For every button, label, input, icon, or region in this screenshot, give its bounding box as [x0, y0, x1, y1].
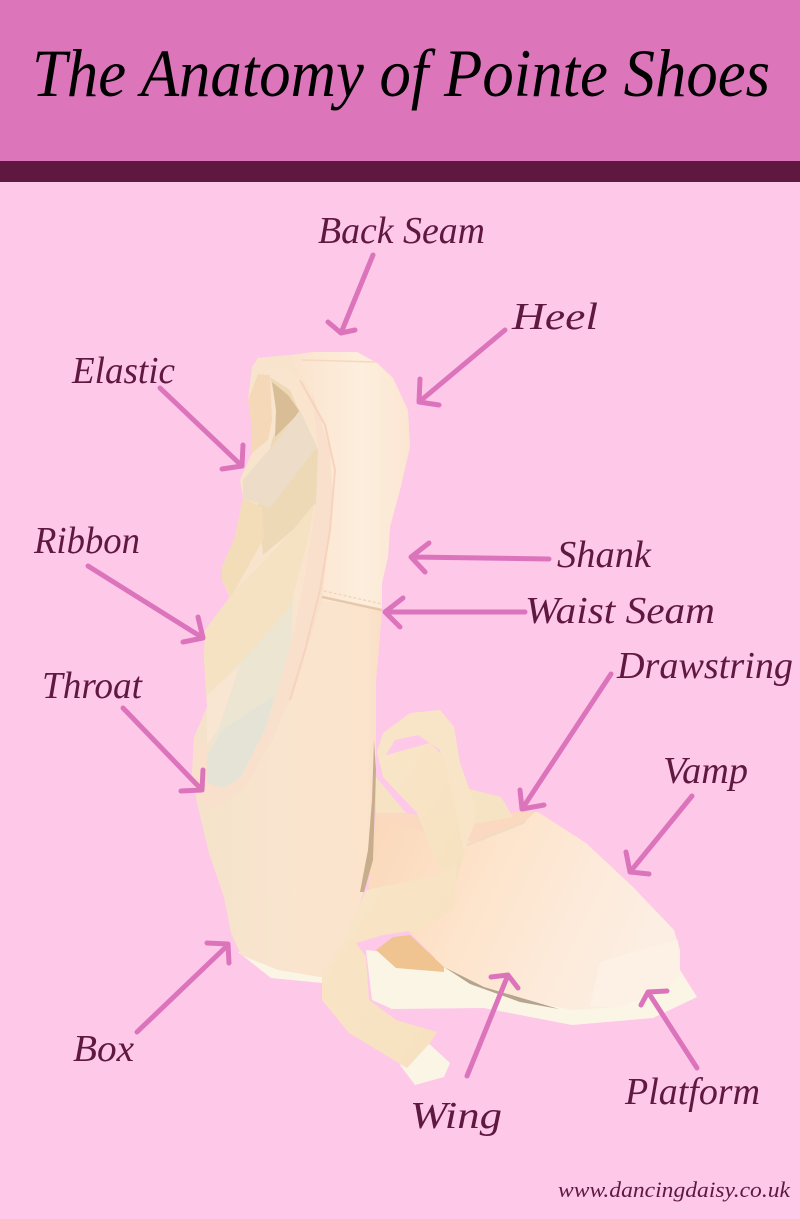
front strand: [379, 743, 464, 880]
side binding: [192, 392, 333, 808]
label: Box: [73, 943, 229, 1070]
label: Wing: [410, 975, 518, 1137]
arrow: Drawstring: [520, 674, 611, 809]
label: Shank: [411, 534, 652, 576]
top back seam: [302, 360, 375, 362]
label: Back Seam: Back Seam: [318, 210, 485, 252]
arrow: Ribbon: [88, 566, 203, 642]
horizontal band and tail: [322, 863, 457, 1068]
platform: [590, 940, 680, 1007]
folded ribbon: [376, 935, 444, 972]
rear strand: [376, 777, 406, 813]
label: Platform: Platform: [624, 1071, 760, 1113]
label: Waist Seam: Waist Seam: [525, 590, 715, 632]
lying shoe: [368, 787, 680, 1010]
rim: [252, 355, 312, 392]
lining: [258, 377, 318, 555]
elastic: [243, 410, 317, 508]
loop: [377, 710, 476, 850]
sole: [444, 967, 559, 1009]
inner ribbon strand: [462, 787, 513, 824]
waist seam: [322, 597, 382, 610]
label: Box: Box: [73, 1028, 134, 1070]
fuzzy interior: [207, 585, 293, 788]
label: Ribbon: [33, 520, 203, 642]
label: Vamp: [626, 750, 748, 874]
arrow: Wing: [467, 975, 518, 1076]
side edge shadow: [360, 740, 376, 892]
label: Throat: [42, 665, 203, 791]
body: [192, 352, 410, 977]
label: Shank: Shank: [557, 534, 652, 576]
arrow: Back Seam: [328, 255, 373, 333]
label: Vamp: Vamp: [663, 750, 748, 792]
label: Back Seam: [318, 210, 485, 333]
label: Heel: Heel: [511, 296, 598, 338]
label: Platform: [624, 991, 760, 1113]
standing shoe: [192, 352, 410, 977]
throat gray: [207, 695, 275, 788]
header banner: [0, 0, 800, 182]
arrow: Platform: [641, 991, 697, 1068]
label: Drawstring: [520, 645, 793, 809]
label: Ribbon: Ribbon: [33, 520, 140, 562]
arrow: Elastic: [160, 388, 243, 469]
behind ribbon: [222, 498, 264, 597]
label: Throat: Throat: [42, 665, 143, 707]
label: Wing: Wing: [410, 1095, 502, 1137]
arrow: Throat: [123, 708, 203, 791]
label: Heel: [419, 296, 598, 405]
arrow: Waist Seam: [385, 598, 525, 627]
label: Drawstring: Drawstring: [616, 645, 793, 687]
collar inner: [248, 374, 272, 453]
arrow: Box: [137, 943, 229, 1032]
arrow: Heel: [419, 330, 505, 405]
heel fabric: [290, 352, 410, 610]
inner ribbon lower: [207, 665, 240, 745]
collar stitching: [290, 380, 335, 700]
label: Elastic: Elastic: [71, 350, 175, 392]
illustration: pair of pointe shoes: [192, 352, 697, 1085]
ground shadow: [238, 950, 697, 1085]
label: Elastic: [71, 350, 243, 469]
long ribbon: [322, 710, 476, 1068]
drawstring band: [376, 808, 535, 842]
front ribbon: [204, 503, 315, 695]
website credit: www.dancingdaisy.co.uk: [558, 1177, 791, 1202]
label: Waist Seam: [385, 590, 715, 632]
arrow: Shank: [411, 543, 549, 572]
arrow: Vamp: [626, 796, 692, 874]
